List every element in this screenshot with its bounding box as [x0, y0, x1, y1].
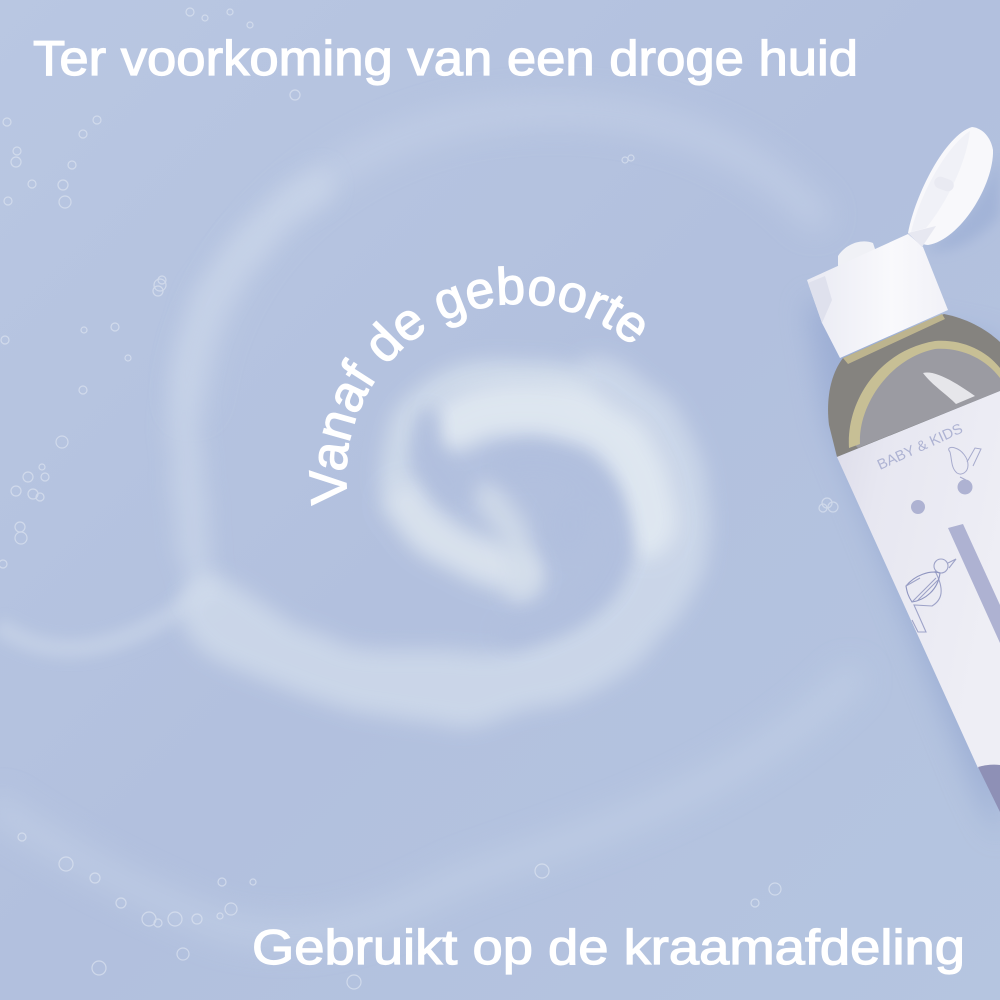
screw cap: [807, 234, 948, 358]
glass body with oil: [828, 314, 1000, 457]
flip lid ring: [908, 127, 993, 245]
footer: bottom headline: Gebruikt op de kraamafdeling: [252, 921, 965, 975]
left tail: [5, 590, 205, 649]
lid inner shading: [911, 131, 970, 232]
glass highlight: [923, 373, 975, 404]
label: [837, 391, 1000, 768]
cap facet shade: [808, 276, 832, 323]
core left ring: [394, 373, 570, 480]
flip lid shadow: [925, 150, 1000, 251]
label text: BABY & KIDS: [875, 421, 965, 474]
inner glass grey: [855, 348, 1000, 448]
large lower band: [215, 390, 674, 687]
hinge: [908, 226, 936, 247]
inner curl: [405, 500, 520, 570]
swirl dark gaps: blue water showing through the spiral: [426, 420, 618, 632]
curved text: from birth: Vanaf de geboorte: [308, 266, 645, 506]
lid peg: [933, 175, 955, 193]
label dot: [911, 500, 925, 514]
label lower band: [978, 765, 1000, 812]
neck oil tint: [843, 314, 945, 364]
core bright crescent: [462, 405, 650, 530]
outer faint ring: [192, 111, 815, 400]
large hummingbird drawing: [906, 559, 956, 632]
swirl: milky oil spiral in the water: [0, 111, 850, 934]
centre hook: [490, 500, 523, 590]
left arc rising: [185, 185, 320, 590]
bottle shadow: [806, 300, 1000, 840]
small bird with ball: [949, 447, 981, 494]
label bar: [948, 524, 1000, 643]
bottom foam band: [0, 680, 850, 934]
nozzle: [838, 241, 876, 266]
bottle: Baby &amp; Kids oil bottle: [806, 127, 1000, 840]
title: top headline: Ter voorkoming van een droge huid: [33, 32, 858, 86]
oil rim: yellow meniscus ring: [849, 341, 1000, 448]
